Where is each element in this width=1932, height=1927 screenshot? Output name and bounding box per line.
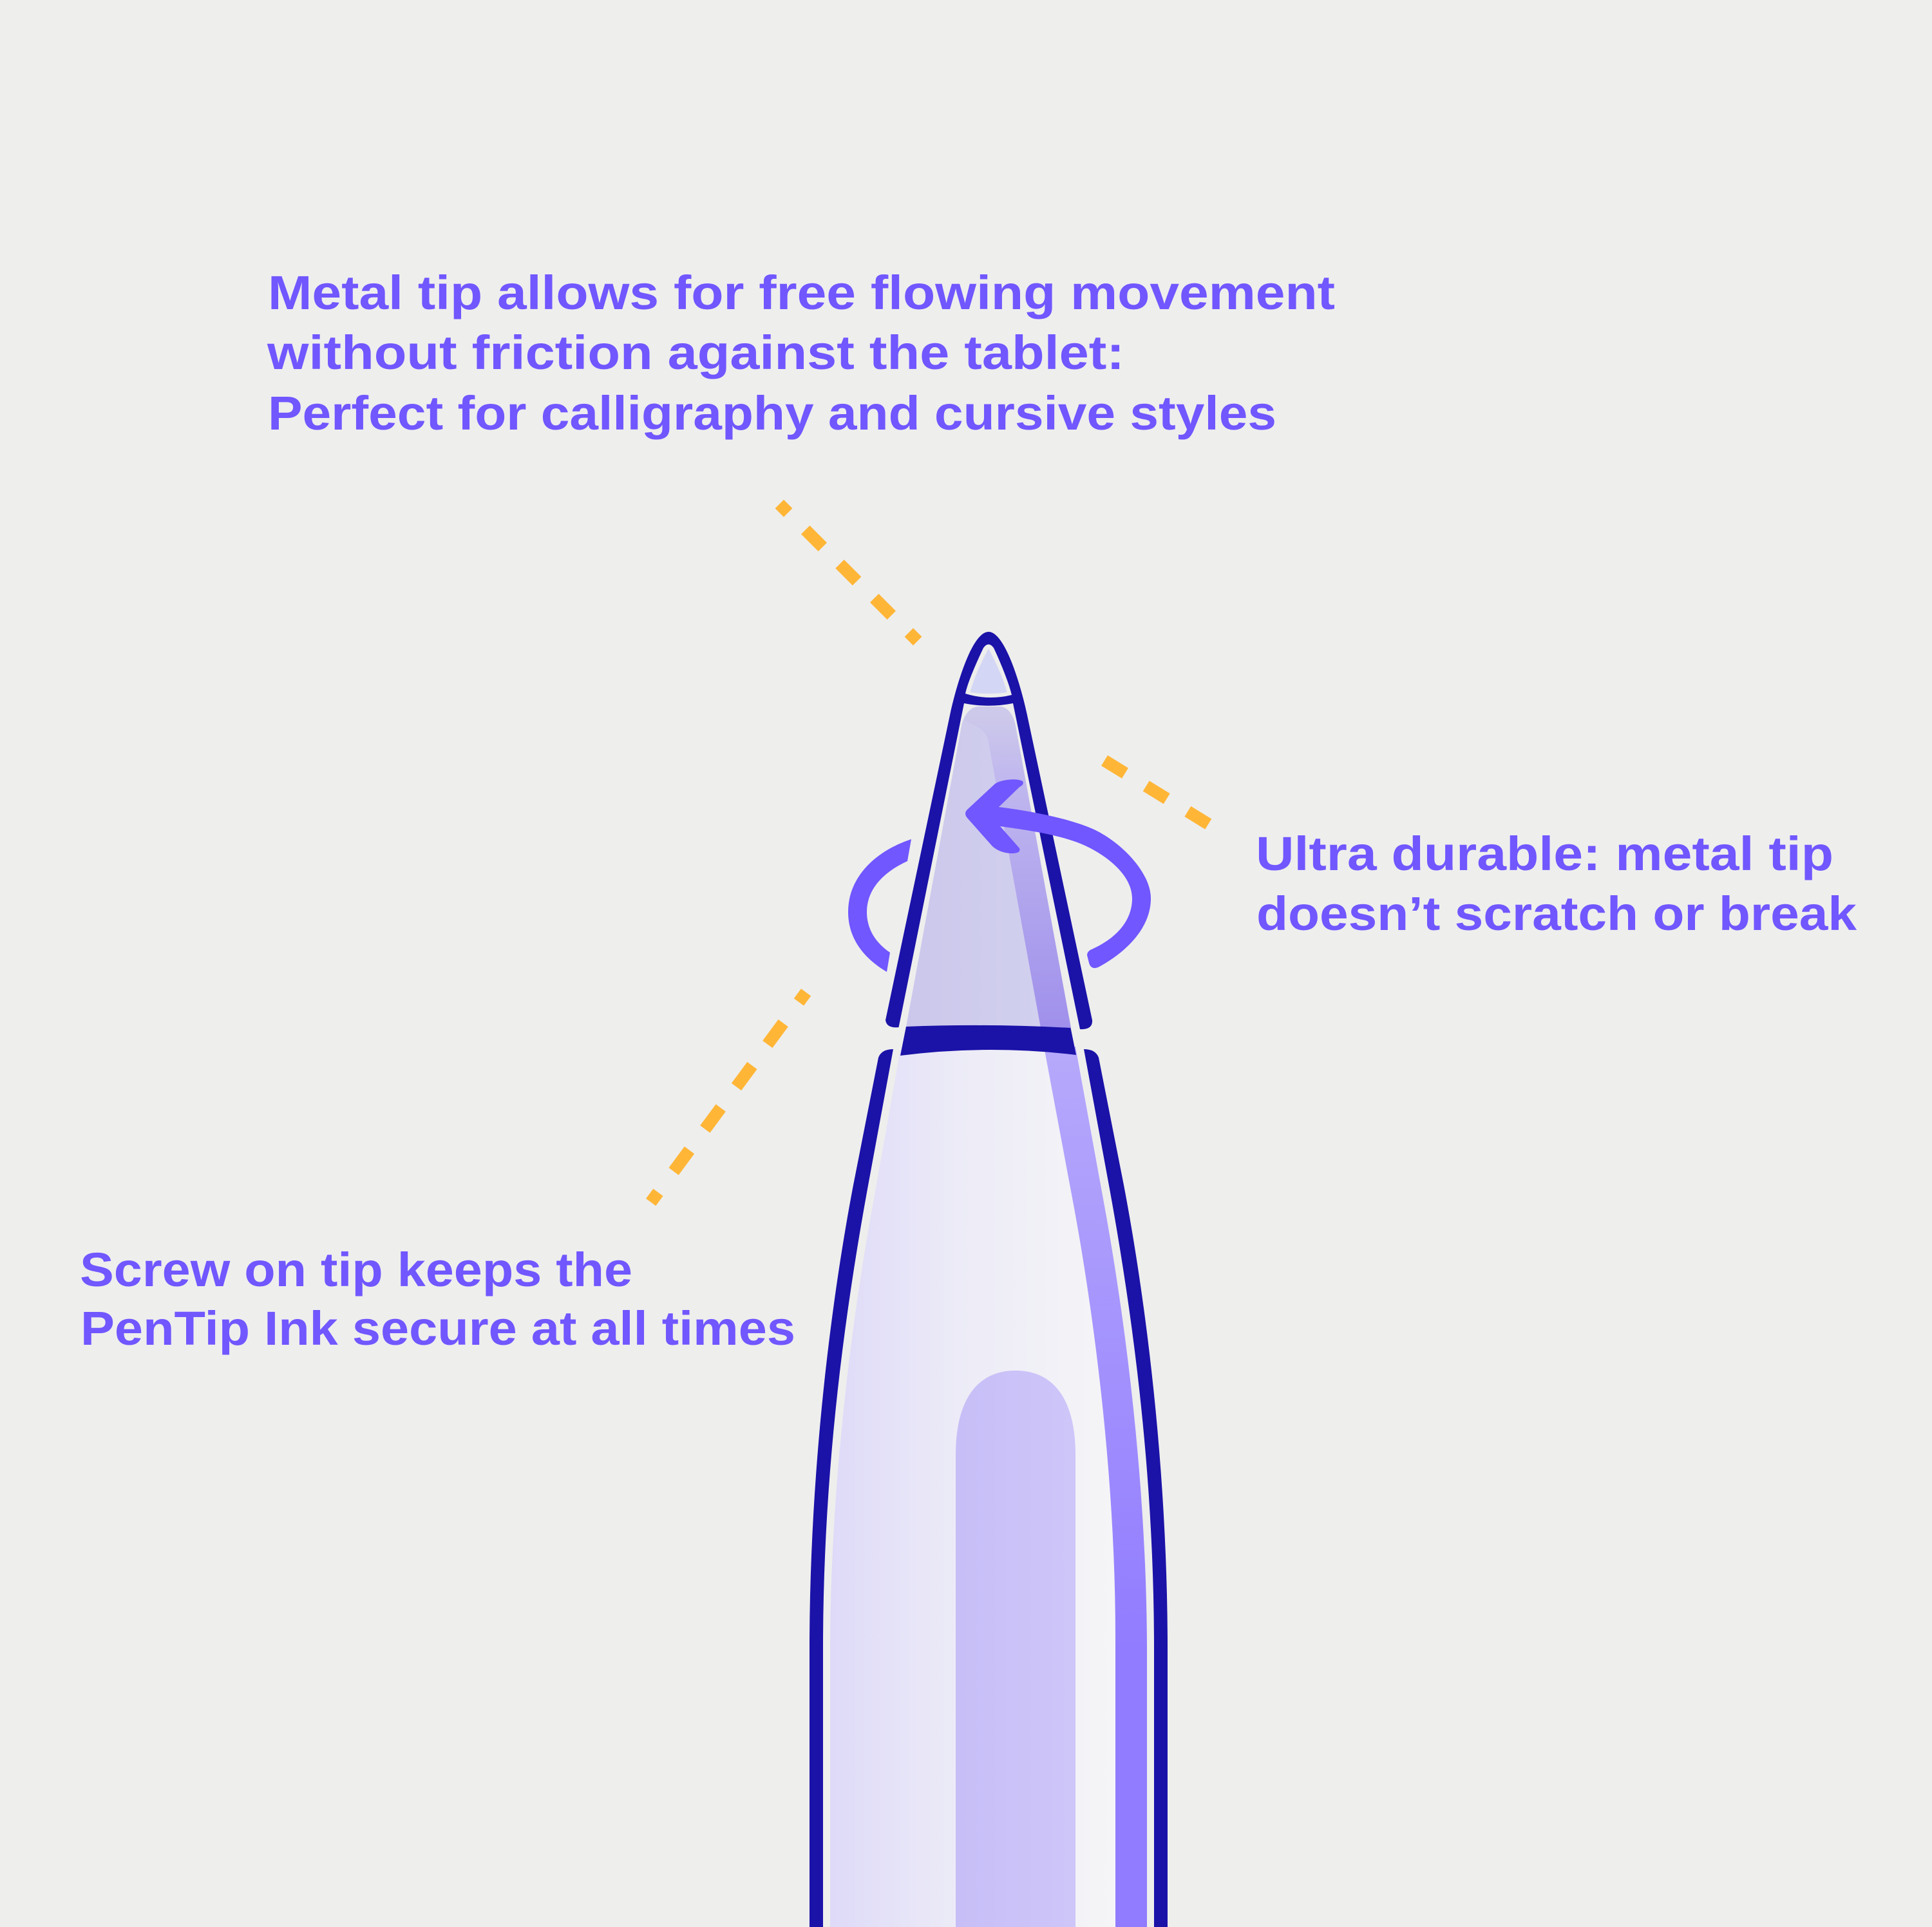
- pen illustration: [810, 632, 1168, 1927]
- arrow rear arc: [848, 839, 911, 972]
- pen body left outline: [810, 1049, 893, 1927]
- pen body grip capsule: [956, 1371, 1075, 1927]
- metal tip point: [970, 649, 1007, 694]
- text block: ultra durable callout: Ultra durable: metal tip: [1256, 827, 1833, 880]
- text block: screw on tip callout: Screw on tip keeps the: [80, 1243, 632, 1296]
- cone fill: [906, 707, 1071, 1028]
- pen body right outline: [1084, 1049, 1168, 1927]
- text block: ultra durable callout: doesn’t scratch or break: [1256, 887, 1857, 940]
- heading text: metal tip callout: [267, 266, 1335, 440]
- text block: ultra durable callout: [1256, 827, 1857, 940]
- tip outline: [886, 632, 1092, 1029]
- heading text: metal tip callout: Perfect for calligraphy and cursive styles: [268, 386, 1276, 440]
- pen body shadow stripe: [1044, 1047, 1147, 1927]
- dashed leader line: screw on tip: [651, 992, 806, 1202]
- heading text: metal tip callout: without friction against the tablet:: [267, 326, 1124, 379]
- dashed leader line: metal tip: [779, 504, 918, 641]
- dashed leader line: ultra durable: [1104, 761, 1208, 824]
- dark collar band: [900, 1025, 1076, 1056]
- arrow front arc and head: [965, 779, 1151, 968]
- pen body fill: [830, 1050, 1147, 1927]
- text block: screw on tip callout: PenTip Ink secure at all times: [80, 1302, 795, 1355]
- heading text: metal tip callout: Metal tip allows for free flowing movement: [268, 266, 1335, 319]
- rotation arrow: [848, 779, 1151, 972]
- cone shadow stripe: [964, 707, 1071, 1028]
- text block: screw on tip callout: [80, 1243, 795, 1355]
